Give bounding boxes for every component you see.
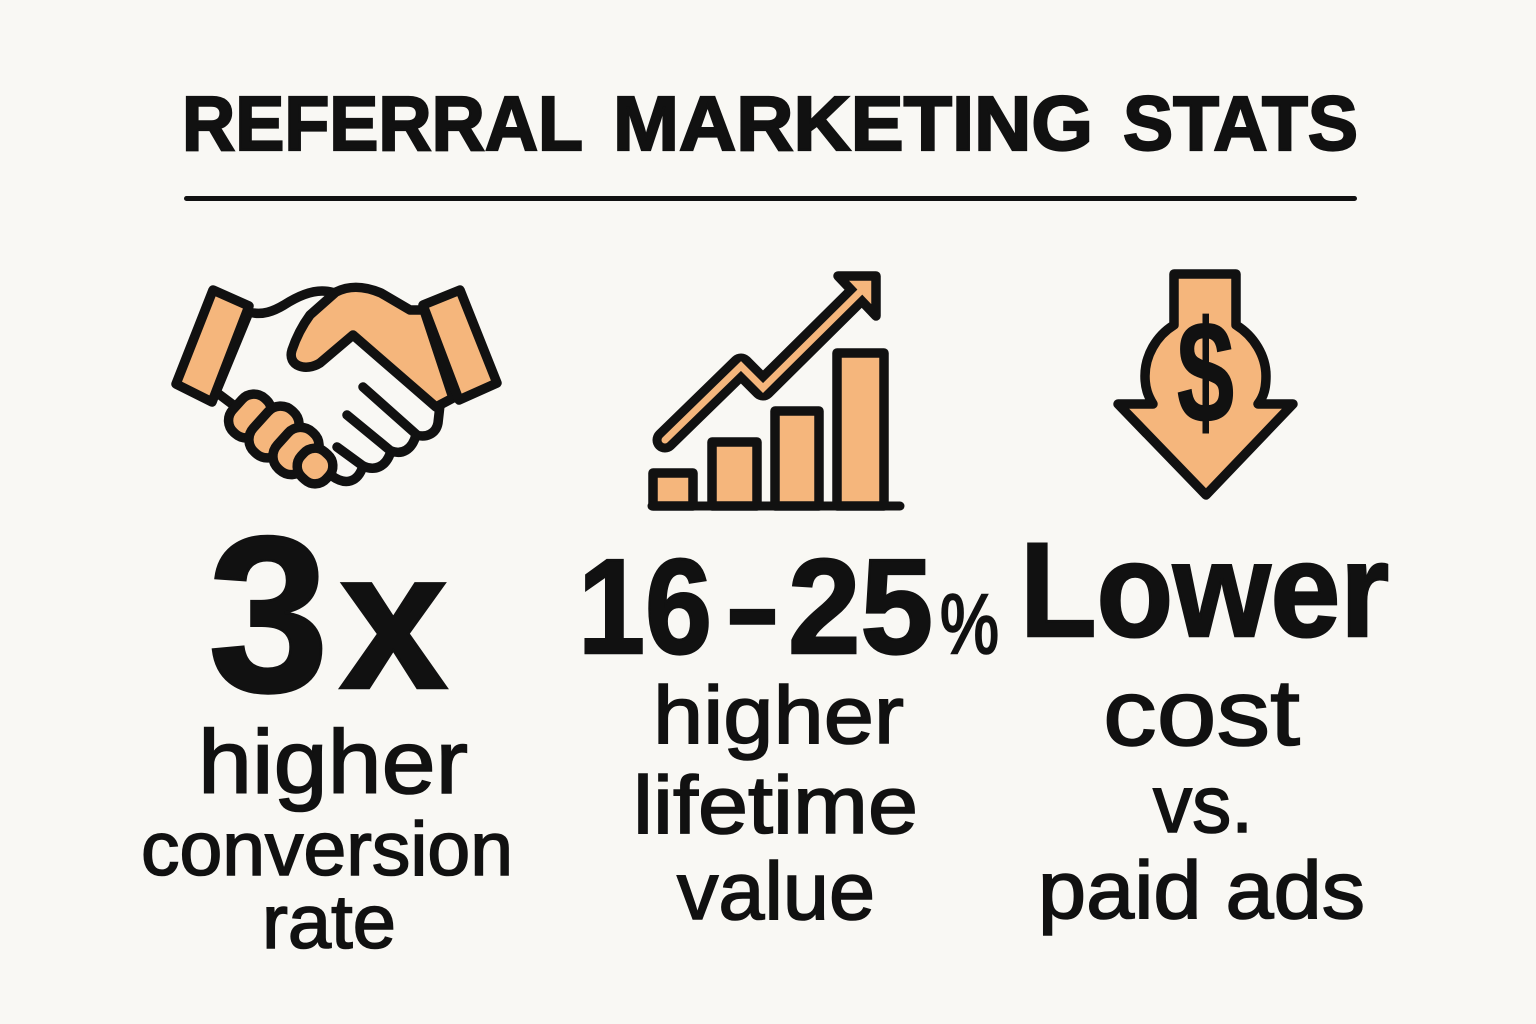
label: higher lifetime value: higher (653, 670, 904, 761)
stat: 16-25%: % (940, 577, 999, 671)
label: cost vs. paid ads: vs. (1153, 759, 1253, 850)
label: higher conversion rate: rate (262, 880, 396, 965)
stat: 3x: 3 (208, 491, 329, 739)
stat: Lower: Lower (1020, 516, 1389, 665)
label: higher conversion rate: conversion (141, 807, 513, 892)
stat: 16-25%: 16 (578, 531, 712, 682)
panel: lifetime value (578, 276, 999, 937)
stat: 16-25% (578, 531, 999, 682)
title: STATS (1123, 81, 1358, 167)
label: higher conversion rate: higher (198, 713, 468, 813)
label: cost vs. paid ads: cost (1103, 660, 1300, 765)
label: higher lifetime value: value (677, 846, 875, 937)
title: REFERRAL (182, 81, 583, 167)
stat: 3x (208, 491, 448, 739)
panel: conversion rate (141, 287, 513, 965)
title (182, 81, 1358, 167)
label: higher conversion rate (141, 713, 513, 965)
label: cost vs. paid ads (1038, 660, 1365, 936)
title: MARKETING (613, 81, 1093, 167)
icon: dollar sign: $ (1177, 291, 1234, 453)
stat: 16-25%: – (728, 531, 777, 682)
stat: 3x: x (339, 509, 448, 730)
label: higher lifetime value: lifetime (633, 760, 918, 851)
label: cost vs. paid ads: paid ads (1038, 845, 1365, 936)
icon: growth chart (652, 276, 900, 506)
icon: handshake (176, 287, 497, 490)
stat: 16-25%: 25 (788, 531, 933, 682)
panel: lower cost (1020, 274, 1389, 936)
icon: down arrow with dollar (1118, 274, 1293, 495)
title rule (184, 196, 1357, 201)
label: higher lifetime value (633, 670, 918, 937)
